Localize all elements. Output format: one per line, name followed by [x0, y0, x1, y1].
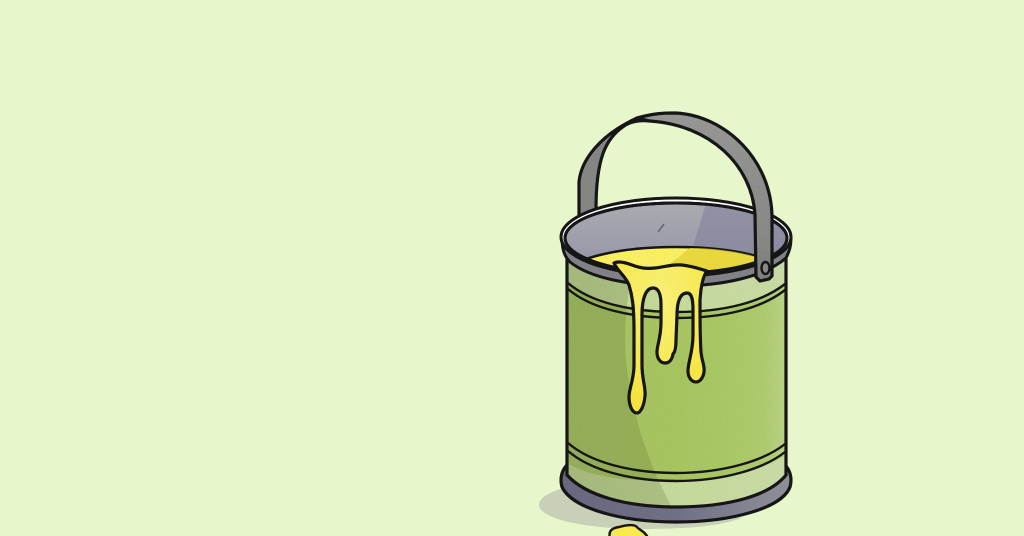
- handle: back left strap: [579, 118, 650, 216]
- shaded interior wall: [693, 206, 786, 254]
- shaded side of the bucket: [568, 263, 671, 506]
- ground shadow: [539, 486, 742, 529]
- rim underside: [562, 238, 791, 286]
- yellow paint drip: [614, 262, 707, 413]
- rim and bucket interior: [560, 196, 792, 286]
- upper band: [568, 261, 784, 311]
- paint shadow: [670, 248, 754, 270]
- lower band: [568, 456, 784, 506]
- handle rivet: [762, 262, 770, 274]
- scratch marks: [658, 224, 664, 232]
- band lines: [568, 283, 785, 481]
- handle: front right strap with lug: [637, 113, 772, 281]
- bucket body: [565, 258, 788, 509]
- paint surface: [587, 246, 754, 270]
- paint puddle: [609, 525, 648, 536]
- grain texture over bucket: [567, 250, 786, 507]
- illustration: paint bucket scene: [539, 111, 793, 536]
- bucket base ring: [561, 466, 791, 522]
